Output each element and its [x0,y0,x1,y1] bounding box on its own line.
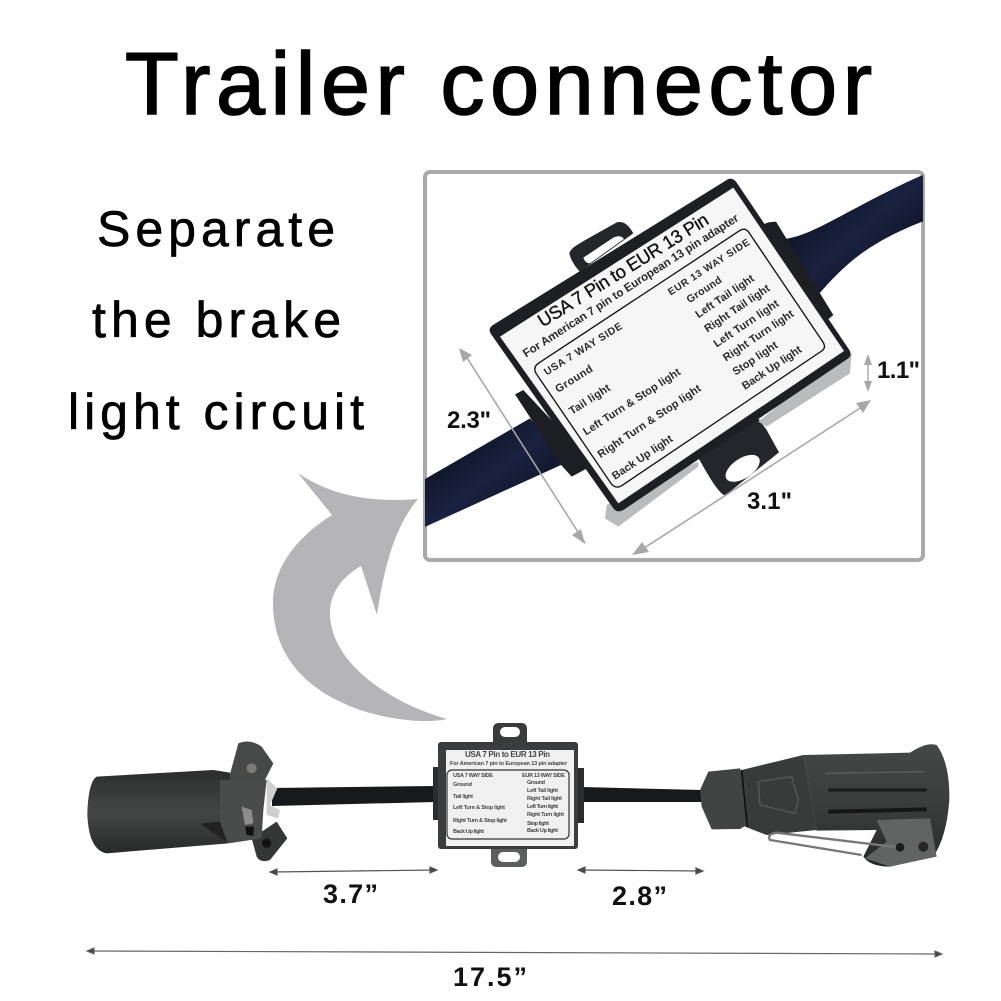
label text: Ground [684,274,724,306]
mounting tab: bottom [699,419,779,496]
small label text: USA 7 Pin to EUR 13 Pin [465,750,550,759]
label: 17.5 inch: 17.5” [453,962,527,992]
plug: US 7 pin [87,741,287,861]
clamps [433,767,584,823]
inner frame [447,770,569,839]
cable: bottom assembly right [582,787,702,802]
housing [438,742,578,849]
dimension arrow: 2.8 inch [578,867,703,874]
text block: separate the brake light circuit: the brake [92,292,341,348]
dimension arrow: 17.5 inch [87,948,942,957]
small label text: Back Up light [453,829,484,835]
label text: Right Tail light [702,282,773,335]
adapter label face [500,188,844,503]
label text: Tail light [567,382,613,418]
label text: Right Turn light [721,308,796,364]
small label text: Left Turn & Stop light [453,805,505,811]
text block: separate the brake light circuit [68,201,364,440]
label text [521,209,804,482]
panel: enlarged adapter box [423,172,927,560]
text block: separate the brake light circuit: Separate [97,201,335,257]
dimension arrow: 1.1 inch [864,354,872,392]
arrow: curved grey pointer [273,473,447,721]
small label text: USA 7 WAY SIDE [453,773,493,779]
side clamps [515,222,833,477]
dimension arrow: 3.7 inch [270,867,437,875]
label text: Stop light [731,339,780,378]
small label text: Stop light [527,821,549,827]
label text: Left Turn & Stop light [581,366,683,438]
plug: EU 13 pin [700,744,949,867]
small label text: Right Turn & Stop light [453,818,507,824]
cable: upper right [783,173,927,297]
label text: Ground [553,363,595,396]
small label text: Right Tail light [527,796,562,802]
cable: lower left [423,418,568,528]
adapter: small box on the cable [433,723,584,867]
label text: USA 7 WAY SIDE [542,321,625,378]
label: 3.7 inch: 3.7” [323,879,378,909]
adapter housing [490,179,851,511]
title: Trailer connector [125,34,872,133]
cable: bottom assembly left [272,786,435,806]
label text: Left Turn light [712,298,782,350]
small label text: Left Tail light [527,788,558,794]
label: 1.1 inch: 1.1" [877,357,920,384]
label text: Back Up light [740,344,804,392]
mounting tab: top [569,222,633,272]
small label text: Tail light [453,794,473,800]
mount tabs [493,723,527,747]
label text: EUR 13 WAY SIDE [666,237,752,298]
label text: Right Turn & Stop light [596,382,704,461]
small label text: For American 7 pin to European 13 pin adapter [450,761,568,767]
label: 3.1 inch: 3.1" [747,488,792,515]
label: 2.8 inch: 2.8” [612,881,667,911]
label inner frame [535,229,824,487]
small label text: Ground [453,782,472,788]
dimension arrow: 3.1 inch [632,400,871,555]
label text: For American 7 pin to European 13 pin adapter [521,211,742,360]
small label text: Right Turn light [527,812,564,818]
text block: separate the brake light circuit: light circuit [68,384,364,440]
label text: Left Tail light [693,272,757,321]
small label text: EUR 13 WAY SIDE [522,773,565,779]
dimension arrow: 2.3 inch [459,348,585,544]
small label text [450,750,568,835]
label face [446,750,574,846]
label: 2.3 inch: 2.3" [447,407,491,434]
small label text: Ground [527,780,545,786]
small label text: Left Turn light [527,804,558,810]
label text: USA 7 Pin to EUR 13 Pin [534,209,712,331]
small label text: Back Up light [527,828,558,834]
label text: Back Up light [610,433,676,482]
adapter side: silver edge [605,353,852,527]
